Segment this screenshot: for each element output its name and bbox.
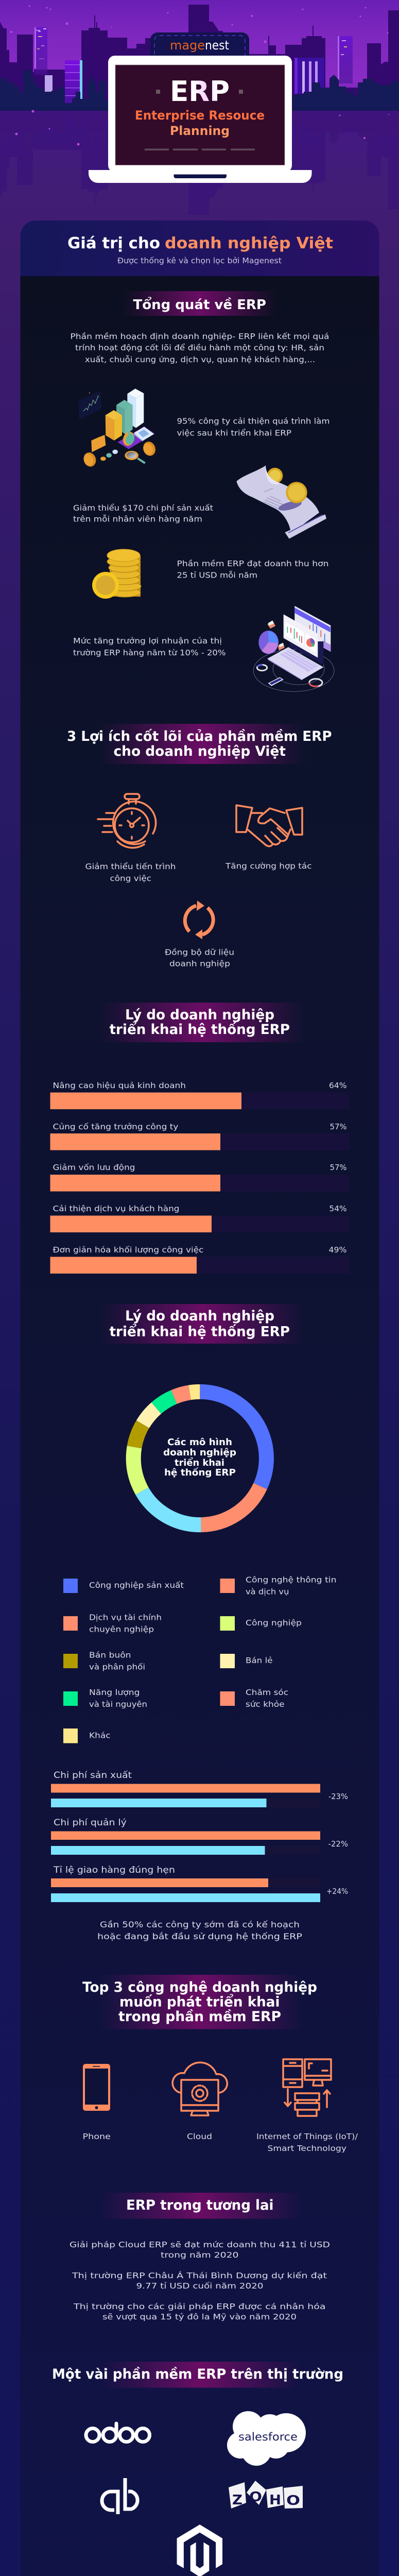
- row 57%: 57%: [329, 1122, 347, 1131]
- front skyline: [0, 70, 399, 110]
- bar chart: reasons: [50, 1081, 349, 1274]
- legend item: wholesale: Bán buôn: [89, 1651, 131, 1660]
- row 54%: Cải thiện dịch vụ khách hàng: [53, 1204, 179, 1213]
- future paragraphs: 9.77 tỉ USD cuối năm 2020: [136, 2281, 264, 2291]
- legend item: retail: Bán lẻ: [246, 1656, 273, 1665]
- cityscape header illustration: [0, 5, 399, 215]
- logo: zoho: H: [269, 2493, 281, 2508]
- icon: IoT: [283, 2059, 331, 2116]
- legend: [63, 1575, 337, 1743]
- logo: magento: [177, 2524, 222, 2576]
- horizon: [0, 107, 399, 111]
- text: stat 4: [73, 636, 225, 657]
- heading: software on the market: [52, 2362, 343, 2387]
- heading: overview: [122, 291, 277, 316]
- caption: [97, 1920, 302, 1941]
- screen dashes: [145, 148, 255, 150]
- laptop screen: [115, 65, 285, 165]
- legend item: IT: Công nghệ thông tin: [246, 1575, 337, 1585]
- subtitle: Được thống kê và chọn lọc bởi Magenest: [117, 256, 282, 265]
- future paragraphs: Thị trường ERP Châu Á Thái Bình Dương dự kiến đạt: [72, 2270, 327, 2280]
- caption: hoặc đang bắt đầu sử dụng hệ thống ERP: [97, 1931, 302, 1941]
- legend item: industry: Công nghiệp: [246, 1618, 302, 1628]
- heading: top 3 technologies: Top 3 công nghệ doanh nghiệp: [82, 1979, 317, 1995]
- screen decorations: [156, 90, 243, 94]
- text: stat 3: Phần mềm ERP đạt doanh thu hơn: [177, 559, 328, 568]
- laptop base: [89, 170, 312, 183]
- heading: top 3 technologies: muốn phát triển khai: [119, 1993, 280, 2010]
- legend item: wholesale: [63, 1651, 145, 1671]
- lit tower right: [338, 36, 353, 83]
- label: benefit 1: Giảm thiểu tiến trình: [85, 862, 176, 871]
- heading: future: [99, 2193, 303, 2218]
- laptop notch: [174, 174, 227, 178]
- icon: cloud: [172, 2062, 227, 2115]
- legend item: other: Khác: [89, 1731, 110, 1740]
- row 57%: Củng cố tăng trưởng công ty: [53, 1122, 178, 1131]
- future paragraphs: trong năm 2020: [161, 2250, 239, 2260]
- text: stat 2: Giảm thiểu $170 chi phí sản xuất: [73, 503, 213, 513]
- icon: stopwatch: [98, 794, 156, 848]
- on-time delivery: +24%: [326, 1887, 348, 1896]
- main title: [67, 234, 333, 252]
- legend item: retail: [220, 1654, 273, 1668]
- text: stat 3: 25 tỉ USD mỗi năm: [177, 571, 257, 580]
- legend item: manufacturing: Công nghiệp sản xuất: [89, 1581, 184, 1590]
- magenest logo: [170, 38, 229, 53]
- legend item: manufacturing: [63, 1579, 184, 1593]
- comparison bars: [51, 1770, 348, 1902]
- magenest logo: nest: [205, 38, 229, 53]
- text: stat 1: việc sau khi triển khai ERP: [177, 429, 291, 438]
- row 49%: [50, 1245, 349, 1274]
- text: stat 4: trường ERP hàng năm từ 10% - 20%: [73, 648, 225, 657]
- donut centre label: hệ thống ERP: [164, 1467, 236, 1478]
- logo: zoho: O: [249, 2489, 262, 2505]
- illustration: receipt and coins: [236, 465, 326, 539]
- overview paragraph: Phần mềm hoạch định doanh nghiệp- ERP liên kết mọi quá: [70, 332, 329, 341]
- row 49%: Đơn giản hóa khối lượng công việc: [53, 1245, 204, 1255]
- on-time delivery: Tỉ lệ giao hàng đúng hẹn: [53, 1865, 175, 1875]
- text: stat 1: 95% công ty cải thiện quá trình làm: [177, 416, 329, 426]
- text: stat 1: [177, 416, 329, 438]
- row 49%: 49%: [328, 1245, 347, 1255]
- heading: reasons 2: Lý do doanh nghiệp: [125, 1308, 274, 1324]
- legend item: industry: [220, 1616, 302, 1631]
- management cost: -22%: [328, 1839, 348, 1849]
- production cost: [51, 1770, 348, 1807]
- text: stat 3: [177, 559, 328, 580]
- columned building right: [294, 58, 324, 94]
- heading: software on the market: Một vài phần mềm ERP trên thị trường: [52, 2366, 343, 2382]
- icon: sync arrows: [185, 901, 213, 939]
- tech labels: Internet of Things (IoT)/: [256, 2132, 358, 2141]
- label: benefit 3: doanh nghiệp: [169, 959, 230, 969]
- row 54%: 54%: [329, 1204, 347, 1213]
- legend item: healthcare: Chăm sóc: [246, 1688, 288, 1697]
- row 57% b: 57%: [329, 1163, 347, 1172]
- panel header: [21, 221, 379, 276]
- stars: [10, 5, 389, 145]
- illustration: coin stack: [92, 549, 141, 599]
- heading: future: ERP trong tương lai: [126, 2197, 274, 2213]
- lit tower left: [34, 27, 47, 75]
- legend item: healthcare: sức khỏe: [246, 1700, 284, 1709]
- future paragraphs: Giải pháp Cloud ERP sẽ đạt mức doanh thu 411 tỉ USD: [70, 2240, 330, 2249]
- heading: top 3 technologies: trong phần mềm ERP: [118, 2009, 281, 2025]
- lit tower centre-left: [65, 60, 82, 104]
- heading: reasons: triển khai hệ thống ERP: [109, 1021, 290, 1038]
- illustration: isometric bars: [79, 388, 158, 468]
- magenest logo: mage: [170, 38, 205, 53]
- logo: zoho: [229, 2481, 303, 2509]
- illustration: laptop dashboard: [253, 606, 334, 691]
- row 57% b: Giảm vốn lưu động: [53, 1163, 135, 1172]
- legend item: finance: chuyên nghiệp: [89, 1625, 154, 1634]
- icon: phone: [83, 2064, 110, 2111]
- heading: reasons 2: [99, 1304, 305, 1344]
- production cost: Chi phí sản xuất: [54, 1770, 132, 1781]
- tech labels: Phone: [82, 2132, 111, 2141]
- legend item: finance: Dịch vụ tài chính: [89, 1613, 162, 1622]
- legend item: energy: [63, 1688, 147, 1709]
- icon: handshake: [236, 805, 302, 846]
- legend item: other: [63, 1728, 110, 1743]
- row 64%: 64%: [329, 1081, 347, 1090]
- logo: salesforce: salesforce: [238, 2431, 298, 2443]
- donut centre label: triển khai: [175, 1457, 224, 1468]
- heading: 3 benefits: 3 Lợi ích cốt lõi của phần mềm ERP: [67, 728, 332, 744]
- future paragraphs: [70, 2240, 330, 2321]
- label: benefit 3: [165, 948, 234, 969]
- row 54%: [50, 1204, 349, 1232]
- heading: 3 benefits: [67, 724, 332, 764]
- row 57% b: [50, 1163, 349, 1191]
- label: benefit 1: công việc: [110, 874, 151, 883]
- label: benefit 1: [85, 862, 176, 883]
- logo: zoho: O: [286, 2493, 300, 2509]
- row 64%: [50, 1081, 349, 1109]
- city reflection in water: [0, 110, 399, 215]
- legend item: wholesale: và phân phối: [89, 1662, 145, 1671]
- back skyline: [0, 5, 399, 110]
- overview paragraph: trính hoạt động cốt lõi để điều hành một công ty: HR, sản: [75, 343, 324, 352]
- tech labels: [82, 2132, 358, 2153]
- row 64%: Nâng cao hiệu quả kinh doanh: [53, 1081, 186, 1090]
- legend item: finance: [63, 1613, 162, 1634]
- screen subtitle line 1: Enterprise Resouce: [135, 108, 265, 123]
- logo: salesforce: [227, 2411, 306, 2466]
- text: stat 4: Mức tăng trưởng lợi nhuận của thị: [73, 636, 222, 646]
- logo: quickbooks: [102, 2478, 137, 2514]
- donut chart: [133, 1392, 266, 1525]
- small lit block left: [45, 75, 53, 92]
- tech labels: Cloud: [187, 2132, 212, 2141]
- main title: doanh nghiệp Việt: [165, 234, 333, 252]
- production cost: -23%: [328, 1792, 348, 1801]
- management cost: Chi phí quản lý: [54, 1818, 127, 1828]
- heading: reasons: Lý do doanh nghiệp: [125, 1007, 274, 1023]
- donut centre label: doanh nghiệp: [163, 1447, 236, 1458]
- logo badge: [150, 32, 249, 63]
- on-time delivery: [51, 1865, 348, 1902]
- logo: odoo: [86, 2424, 149, 2442]
- legend item: IT: và dịch vụ: [246, 1587, 289, 1596]
- logo: zoho: Z: [232, 2493, 242, 2508]
- label: benefit 3: Đồng bộ dữ liệu: [165, 948, 234, 957]
- heading: top 3 technologies: [82, 1975, 317, 2029]
- heading: 3 benefits: cho doanh nghiệp Việt: [113, 743, 286, 759]
- text: stat 2: [73, 503, 213, 523]
- future paragraphs: Thị trường cho các giải pháp ERP được cá nhân hóa: [73, 2302, 325, 2311]
- tech labels: Smart Technology: [268, 2144, 346, 2153]
- laptop: [89, 56, 312, 183]
- screen subtitle line 2: Planning: [170, 124, 230, 138]
- caption: Gần 50% các công ty sớm đã có kế hoạch: [100, 1920, 300, 1929]
- heading: reasons: [99, 1003, 305, 1042]
- legend item: energy: Năng lượng: [89, 1688, 140, 1697]
- legend item: healthcare: [220, 1688, 288, 1709]
- screen title ERP: ERP: [170, 75, 230, 108]
- donut centre label: Các mô hình: [167, 1437, 232, 1448]
- donut centre label: [163, 1437, 236, 1478]
- heading: reasons 2: triển khai hệ thống ERP: [109, 1323, 290, 1340]
- heading: overview: Tổng quát về ERP: [133, 296, 266, 313]
- overview paragraph: xuất, chuỗi cung ứng, dịch vụ, quan hệ khách hàng,...: [85, 355, 315, 364]
- legend item: IT: [220, 1575, 337, 1596]
- row 57%: [50, 1122, 349, 1150]
- legend item: energy: và tài nguyên: [89, 1700, 147, 1709]
- label: benefit 2: Tăng cường hợp tác: [225, 861, 312, 871]
- management cost: [51, 1818, 348, 1855]
- overview paragraph: [70, 332, 329, 364]
- text: stat 2: trên mỗi nhân viên hàng năm: [73, 514, 202, 523]
- main title: Giá trị cho: [67, 234, 160, 252]
- future paragraphs: sẽ vượt qua 15 tỷ đô la Mỹ vào năm 2020: [102, 2312, 297, 2321]
